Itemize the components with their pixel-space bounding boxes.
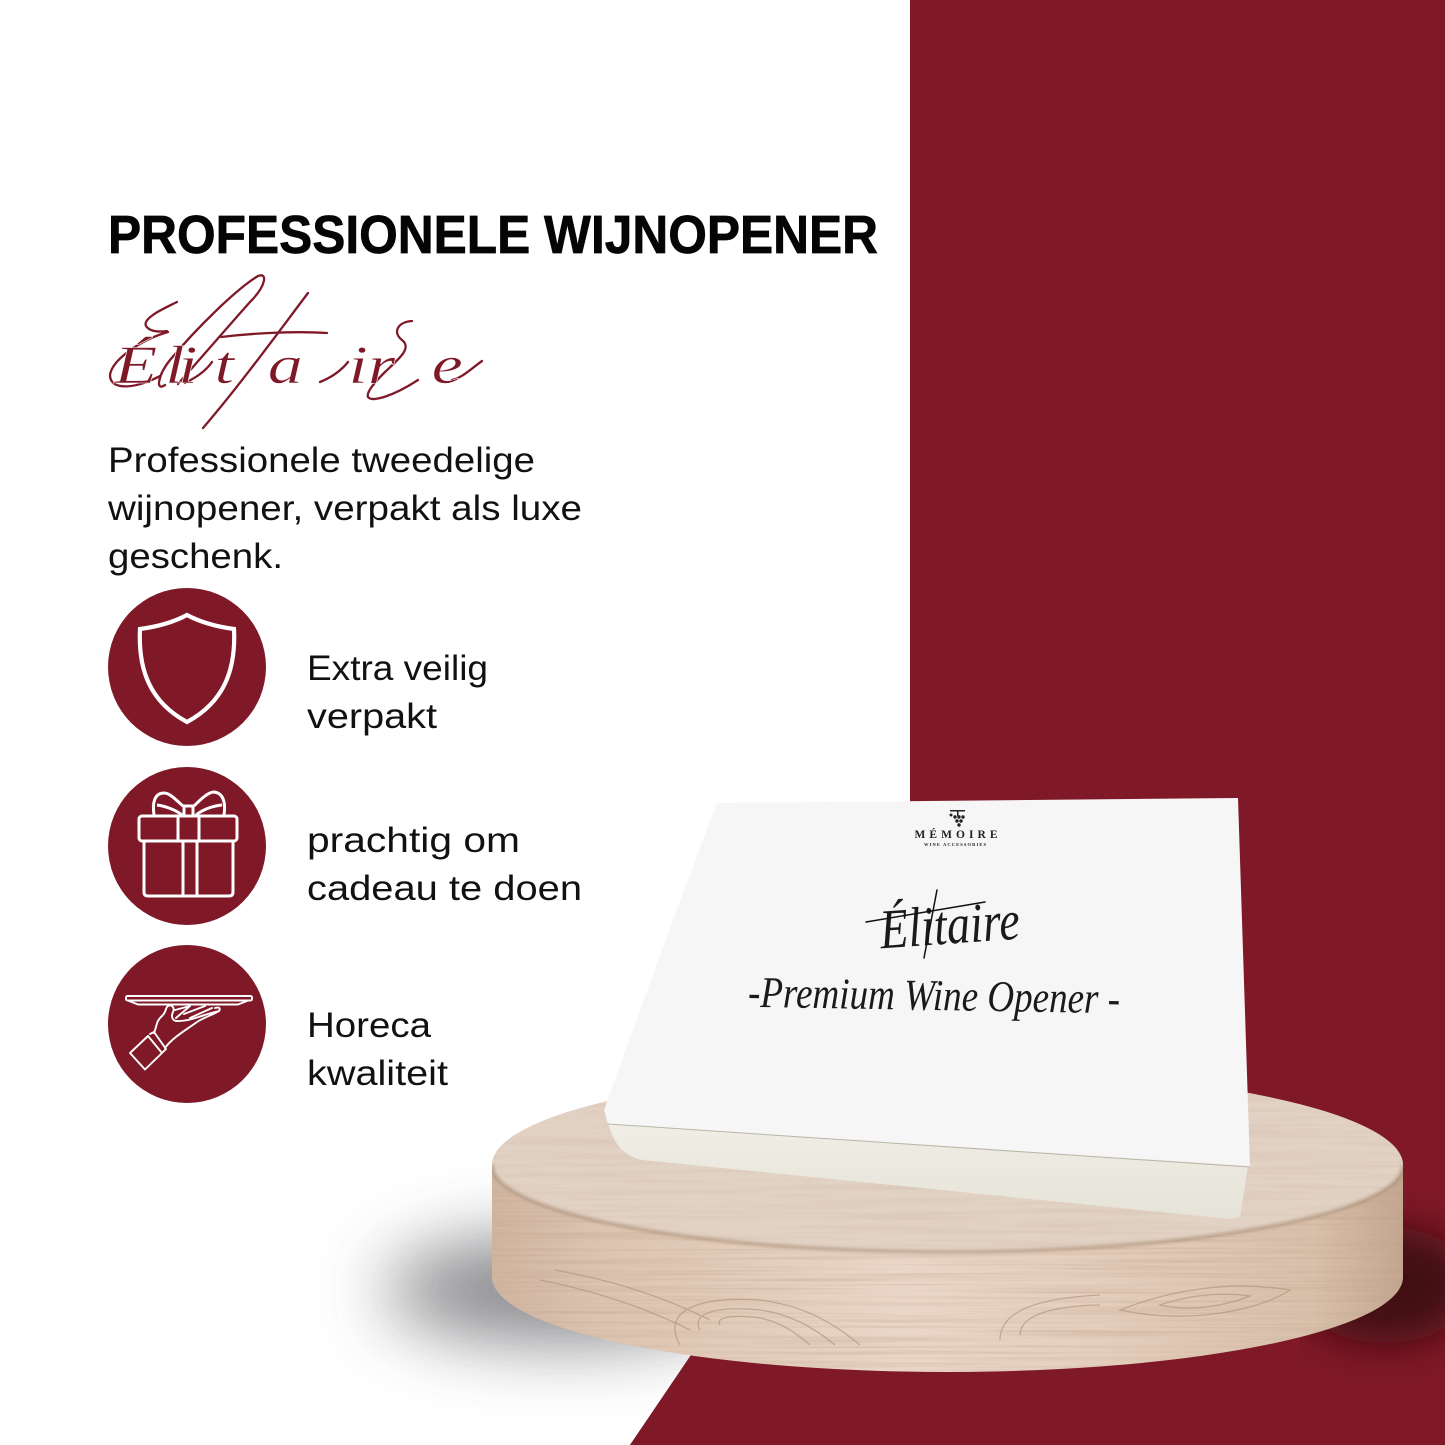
- intro text: Professionele tweedelige: [108, 441, 535, 480]
- feature text: extra veilig verpakt: Extra veilig: [307, 649, 488, 688]
- feature text: horeca kwaliteit: [307, 1006, 448, 1093]
- feature text: horeca kwaliteit: Horeca: [307, 1006, 432, 1045]
- intro text: wijnopener, verpakt als luxe: [107, 489, 582, 528]
- box script subtitle: -Premium Wine Opener -: [748, 968, 1120, 1023]
- pedestal shadow: [385, 1227, 1445, 1445]
- gift box: [604, 798, 1250, 1219]
- feature text: prachtig om cadeau te doen: [307, 821, 582, 908]
- panel: red background: [630, 0, 1445, 1445]
- script heading: Élitaire: Élitaire: [113, 335, 463, 395]
- wooden pedestal: [492, 1092, 1403, 1372]
- feature text: extra veilig verpakt: [307, 649, 488, 736]
- box script title: Élitaire: [877, 890, 1022, 961]
- script heading: Élitaire: [110, 275, 482, 428]
- feature text: prachtig om cadeau te doen: cadeau te doen: [307, 869, 582, 908]
- intro text: geschenk.: [108, 537, 283, 576]
- title: PROFESSIONELE WIJNOPENER: [108, 205, 878, 265]
- pedestal top surface: [492, 1092, 1403, 1255]
- feature text: prachtig om cadeau te doen: prachtig om: [307, 821, 520, 860]
- icon: gift: [108, 767, 266, 925]
- icon: grape logo: [950, 810, 965, 827]
- feature text: horeca kwaliteit: kwaliteit: [307, 1054, 448, 1093]
- icon: hand with tray: [108, 945, 266, 1103]
- box brand text: MÉMOIRE: [914, 827, 998, 841]
- box brand text: WINE ACCESSORIES: [924, 842, 986, 847]
- box brand text: [914, 827, 998, 847]
- feature text: extra veilig verpakt: verpakt: [307, 697, 437, 736]
- intro text: [107, 441, 582, 576]
- icon: shield: [108, 588, 266, 746]
